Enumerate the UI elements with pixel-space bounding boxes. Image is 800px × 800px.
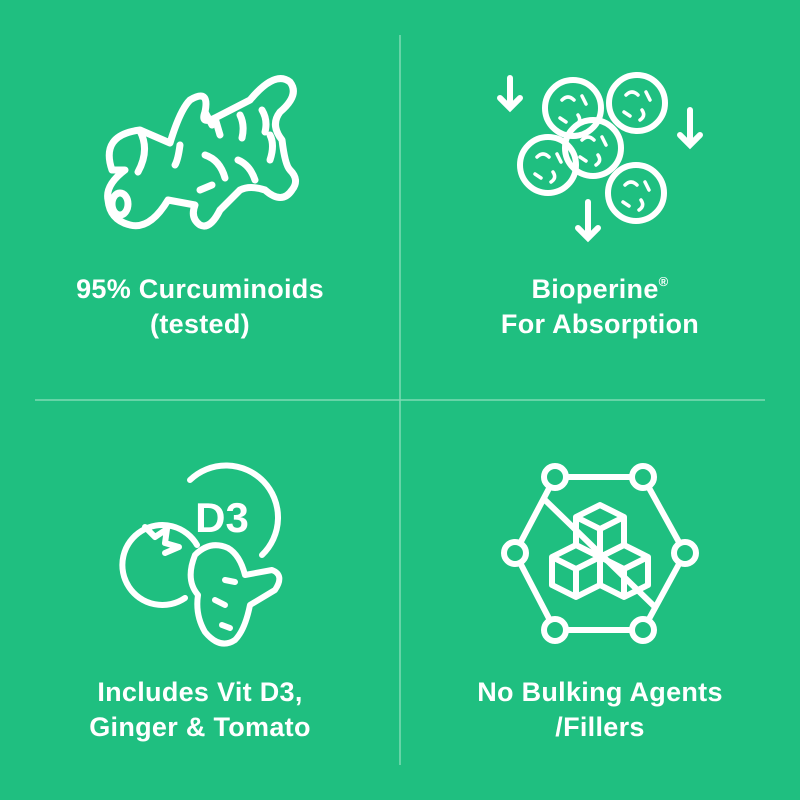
text: Bioperine <box>501 274 699 339</box>
icon: ginger root <box>108 79 296 226</box>
text: 95% Curcuminoids: 95% Curcuminoids <box>76 274 324 304</box>
icon: no fillers hexagon <box>504 466 696 641</box>
text: No Bulking Agents <box>477 677 723 742</box>
text: 95% Curcuminoids: (tested) <box>150 309 250 339</box>
text: Includes Vit D3: Includes Vit D3, <box>97 677 303 707</box>
text: 95% Curcuminoids <box>76 274 324 339</box>
text: Includes Vit D3 <box>89 677 311 742</box>
text: No Bulking Agents: No Bulking Agents <box>477 677 723 707</box>
icon: bioperine peppercorns <box>500 75 700 238</box>
text: Bioperine: For Absorption <box>501 309 699 339</box>
text: Includes Vit D3: Ginger & Tomato <box>89 712 311 742</box>
text: No Bulking Agents: /Fillers <box>555 712 645 742</box>
icon: D3 tomato ginger <box>122 465 279 644</box>
icon: D3 tomato ginger: D3 <box>195 494 249 541</box>
text: Bioperine: Bioperine® <box>531 274 669 304</box>
